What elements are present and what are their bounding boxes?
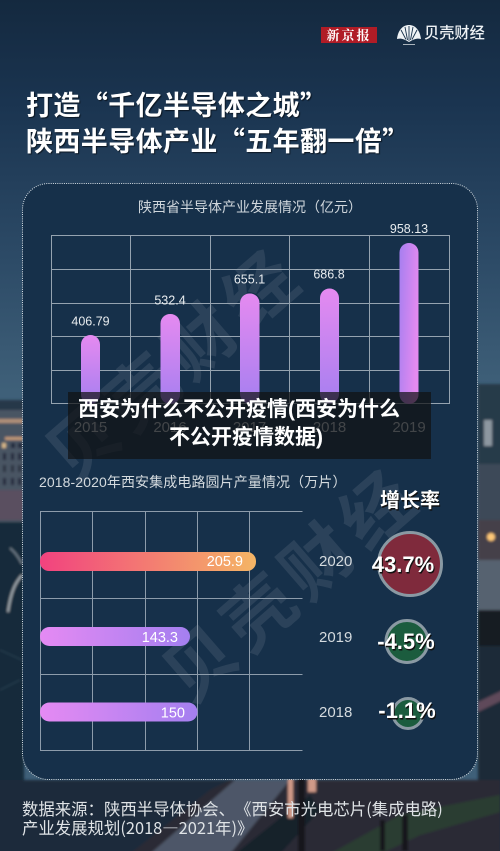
- left road: [0, 522, 24, 851]
- watermark: upper: 贝壳财经: [32, 233, 318, 497]
- bar chart: wafer output 2018-2020: 2020: [319, 553, 352, 570]
- column chart: industry output 2015-2019: 406.79: [71, 314, 110, 328]
- chart title: Xi'an wafer output: 2018-2020年西安集成电路圆片产量情况（万片）: [39, 474, 347, 490]
- overlay caption text: 不公开疫情数据): [169, 426, 323, 449]
- bar chart: wafer output 2018-2020: 2019: [319, 629, 352, 646]
- bar chart: wafer output 2018-2020: 150: [161, 706, 185, 722]
- overlay caption text: 西安为什么不公开疫情(西安为什么: [78, 398, 400, 421]
- overlay caption text: [78, 398, 400, 449]
- watermark: lower: 贝壳财经: [149, 453, 435, 717]
- source note: 数据来源：陕西半导体协会、《西安市光电芯片(集成电路): [22, 796, 443, 820]
- column chart: industry output 2015-2019: 2016: [153, 419, 187, 436]
- column chart: industry output 2015-2019: 958.13: [390, 222, 428, 236]
- growth rate circles: -1.1%: [379, 700, 437, 724]
- source note: [22, 796, 443, 839]
- title: [26, 84, 410, 159]
- growth rate circles: -1.1%: [378, 698, 436, 723]
- growth rate circles: 43.7%: [372, 552, 434, 577]
- growth rate circles: -4.5%: [378, 630, 436, 656]
- column chart: industry output 2015-2019: 2019: [392, 419, 426, 436]
- foreground road: [0, 780, 500, 851]
- column chart: industry output 2015-2019: 2018: [313, 419, 346, 436]
- column chart: industry output 2015-2019: 532.4: [154, 294, 186, 308]
- heading: growth rate: 增长率: [380, 490, 440, 512]
- title: 陕西半导体产业“五年翻一倍”: [26, 120, 410, 159]
- column chart: industry output 2015-2019: 2017: [233, 419, 266, 436]
- bar chart: wafer output 2018-2020: 143.3: [142, 630, 178, 646]
- overlay caption: [68, 392, 431, 459]
- logo: 贝壳财经: [397, 24, 485, 45]
- right buildings and road: [478, 384, 500, 464]
- growth rate circles: -4.5%: [377, 629, 435, 654]
- column chart: industry output 2015-2019: 2015: [74, 419, 107, 436]
- title: 打造“千亿半导体之城”: [26, 84, 327, 123]
- left buildings: [0, 400, 24, 525]
- bar chart: wafer output 2018-2020: 2018: [319, 704, 352, 721]
- logo: 贝壳财经: 贝壳财经: [424, 25, 485, 42]
- source note: 产业发展规划(2018—2021年)》: [22, 815, 253, 839]
- column chart: industry output 2015-2019: 686.8: [313, 268, 345, 282]
- bar chart: wafer output 2018-2020: 205.9: [207, 554, 243, 570]
- logo: 新京报: [321, 27, 377, 43]
- growth rate circles: 43.7%: [373, 554, 435, 578]
- logo: 新京报: 新京报: [326, 25, 372, 44]
- chart title: Shaanxi semiconductor industry: 陕西省半导体产业发展情况（亿元）: [138, 199, 362, 215]
- column chart: industry output 2015-2019: 655.1: [234, 272, 265, 286]
